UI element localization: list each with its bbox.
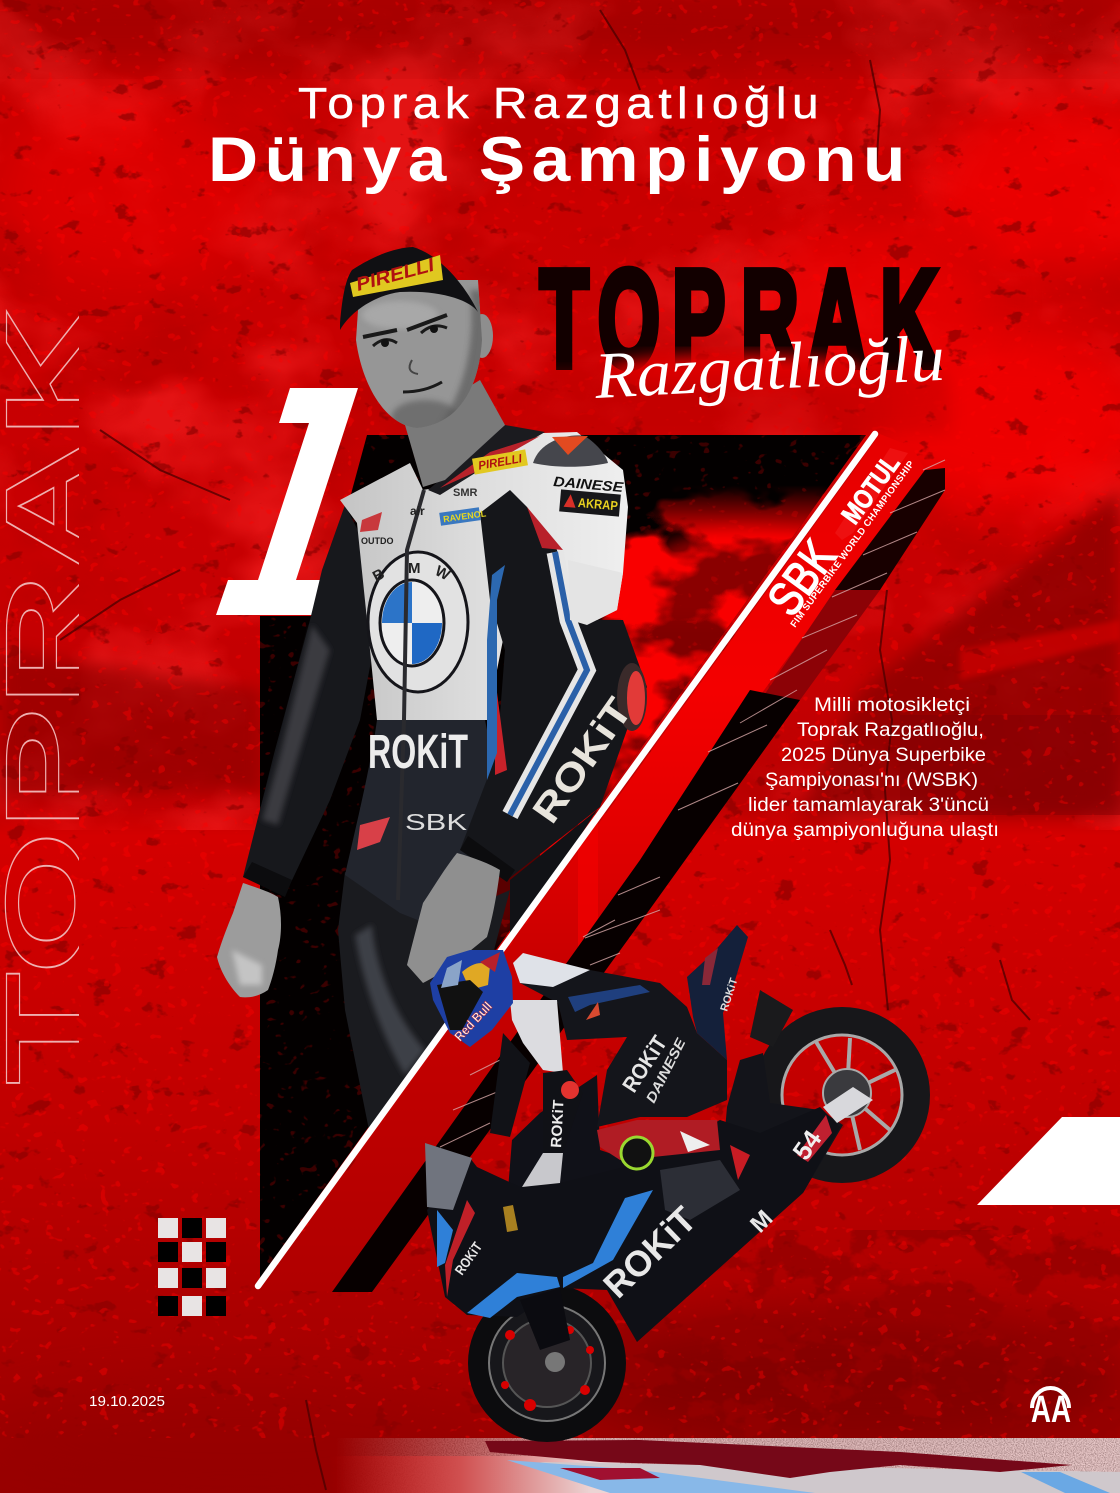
cap bbox=[340, 247, 478, 330]
small sponsors: air bbox=[410, 504, 425, 518]
helmet: Red Bull bbox=[451, 999, 495, 1044]
gold fork bbox=[503, 1205, 518, 1232]
motorcycle stunt bbox=[425, 925, 916, 1442]
fuel tank bbox=[508, 1075, 660, 1195]
motorcycle stunt: DAINESE bbox=[642, 1035, 689, 1105]
BMW roundel: M bbox=[408, 560, 420, 577]
blue side stripe bbox=[487, 565, 505, 780]
swingarm silver bbox=[823, 1087, 873, 1123]
rider body bbox=[520, 970, 727, 1127]
ear bbox=[480, 314, 493, 358]
forearm sponsor: ROKiT bbox=[525, 691, 641, 831]
BMW roundel: B bbox=[370, 565, 388, 586]
right hand bbox=[407, 853, 500, 983]
zipper bbox=[402, 490, 426, 720]
checkered flag bbox=[158, 1218, 226, 1316]
elbow puck bbox=[617, 663, 647, 731]
rider boot bbox=[687, 925, 748, 1060]
title line 1: Toprak Razgatlıoğlu bbox=[298, 79, 824, 128]
white sleeve panel bbox=[570, 569, 623, 625]
script name: Razgatlıoğlu bbox=[592, 322, 946, 413]
small sponsors: PIRELLI bbox=[477, 451, 523, 473]
bright diagonal band bbox=[262, 434, 925, 1292]
bike sponsor: ROKiT bbox=[595, 1198, 704, 1306]
SBK mark: SBK bbox=[758, 531, 847, 625]
front fork bbox=[520, 1288, 570, 1350]
motorcycle stunt: ROKiT bbox=[548, 1099, 568, 1148]
small sponsors bbox=[360, 449, 625, 546]
sleeve stripes bbox=[510, 552, 587, 815]
rider portrait bbox=[217, 247, 647, 1135]
rider blue accents bbox=[568, 985, 650, 1012]
championship line: FIM SUPERBIKE WORLD CHAMPIONSHIP bbox=[789, 459, 917, 630]
left arm bbox=[243, 505, 378, 895]
SBK and MOTUL logo bbox=[758, 448, 917, 630]
front wheel bbox=[468, 1284, 626, 1442]
fairing body bbox=[427, 1107, 840, 1342]
thin diagonal lines bbox=[440, 460, 945, 1147]
bike M logo: M bbox=[745, 1205, 778, 1238]
small sponsors: RAVENOL bbox=[442, 508, 487, 524]
rider white upper arm bbox=[510, 1000, 563, 1073]
description text: Milli motosikletçi bbox=[814, 694, 970, 716]
MOTUL badge bbox=[835, 448, 908, 540]
blue fairing panels bbox=[437, 1190, 653, 1318]
BMW roundel bbox=[368, 552, 468, 692]
face bbox=[356, 280, 482, 428]
cuffs bbox=[243, 862, 292, 897]
bottom track strip bbox=[330, 1438, 1120, 1493]
SBK and MOTUL logo: MOTUL bbox=[836, 449, 906, 530]
upper torso bbox=[340, 432, 628, 720]
small sponsors: AKRAP bbox=[577, 495, 619, 513]
rear wheel bbox=[768, 1021, 916, 1169]
chest sponsor: ROKiT bbox=[368, 726, 468, 779]
lower torso bbox=[345, 720, 497, 925]
helmet bbox=[430, 950, 513, 1047]
date: 19.10.2025 bbox=[89, 1394, 165, 1410]
rider sponsors: ROKiT bbox=[617, 1031, 672, 1097]
black diagonal panel bbox=[250, 430, 880, 1290]
title line 2: Dünya Şampiyonu bbox=[208, 125, 912, 195]
collar bbox=[428, 425, 545, 495]
description text: Şampiyonası'nı (WSBK) bbox=[765, 769, 978, 791]
neck bbox=[405, 380, 505, 487]
black name: TOPRAK bbox=[540, 241, 938, 395]
description text: 2025 Dünya Superbike bbox=[781, 744, 986, 766]
knee puck bbox=[621, 1137, 653, 1169]
white diagonal line bbox=[258, 434, 875, 1286]
description text: dünya şampiyonluğuna ulaştı bbox=[731, 819, 999, 841]
BMW roundel: W bbox=[432, 563, 453, 585]
small sponsors: OUTDO bbox=[361, 536, 394, 546]
forearm bbox=[543, 1070, 583, 1153]
description text: lider tamamlayarak 3'üncü bbox=[748, 794, 989, 816]
rider white back patch bbox=[513, 953, 590, 987]
motorcycle stunt: ROKiT bbox=[451, 1239, 485, 1278]
engine bbox=[660, 1160, 740, 1220]
legs bbox=[338, 872, 510, 1135]
glove bbox=[522, 1153, 563, 1187]
vertical red strip bbox=[578, 815, 598, 970]
black diagonal stripe bbox=[332, 468, 945, 1292]
red patch bbox=[357, 817, 390, 850]
description text bbox=[731, 694, 999, 841]
left hand bbox=[217, 883, 281, 997]
title bbox=[208, 79, 912, 195]
rider portrait: PIRELLI bbox=[354, 255, 437, 296]
rider back arm bbox=[490, 1033, 530, 1137]
exhaust bbox=[750, 990, 793, 1047]
AA logo: AA bbox=[1031, 1389, 1071, 1431]
SBK badge: SBK bbox=[405, 809, 468, 835]
dainese marks bbox=[680, 1131, 710, 1152]
description text: Toprak Razgatlıoğlu, bbox=[797, 719, 984, 741]
facial features bbox=[363, 315, 447, 392]
red side stripe bbox=[495, 692, 507, 775]
seat and swingarm bbox=[720, 1053, 843, 1193]
white parallelogram bbox=[977, 1117, 1120, 1205]
right arm bbox=[460, 490, 647, 880]
rider knee bbox=[597, 1120, 720, 1160]
small sponsors: SMR bbox=[453, 487, 478, 499]
red nose accent bbox=[445, 1200, 475, 1297]
number one bbox=[216, 388, 358, 615]
shoulder slider bbox=[533, 435, 608, 467]
red shoulder triangle bbox=[527, 507, 563, 550]
small sponsors: DAINESE bbox=[553, 473, 625, 495]
race number: 54 bbox=[786, 1124, 828, 1165]
motorcycle stunt: ROKiT bbox=[718, 976, 741, 1013]
windscreen bbox=[425, 1143, 472, 1210]
